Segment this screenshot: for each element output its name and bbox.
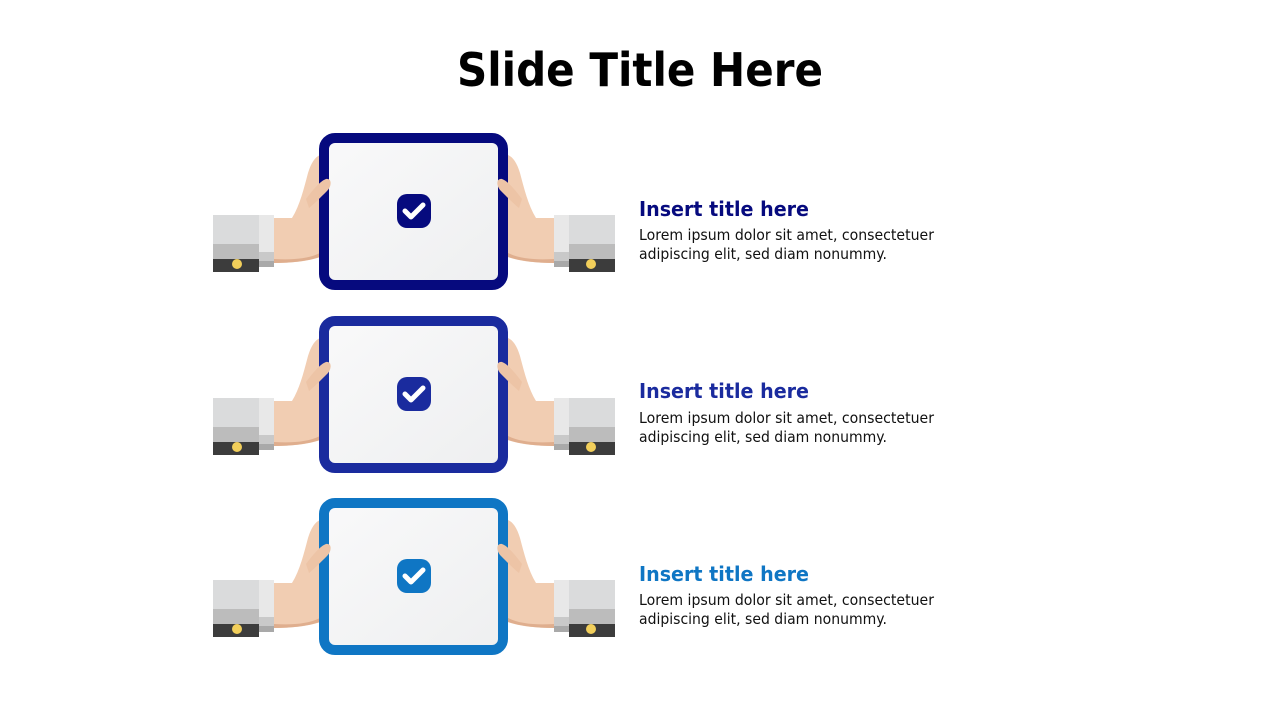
- row 2: tablet with hands: [213, 321, 615, 468]
- text block 2: [639, 379, 935, 446]
- text block 3: [639, 562, 935, 628]
- icon: left hand: [213, 520, 320, 637]
- icon: left thumb: [306, 544, 331, 573]
- tablet frame: [324, 321, 503, 468]
- text block 1: Insert title here: [639, 197, 809, 221]
- icon: check: [397, 194, 431, 228]
- row 3: tablet with hands: [213, 503, 615, 650]
- tablet frame: [324, 503, 503, 650]
- text block 2: Insert title here: [639, 379, 809, 403]
- icon: check: [397, 559, 431, 593]
- text block 1: Lorem ipsum dolor sit amet, consectetuer: [639, 226, 935, 244]
- icon: check: [397, 377, 431, 411]
- icon: left hand: [213, 338, 320, 455]
- text block 1: adipiscing elit, sed diam nonummy.: [639, 245, 887, 263]
- icon: right thumb: [497, 179, 522, 208]
- title: Slide Title Here: [457, 43, 823, 97]
- icon: left hand: [213, 155, 320, 272]
- text block 3: Insert title here: [639, 562, 809, 586]
- text block 3: adipiscing elit, sed diam nonummy.: [639, 610, 887, 628]
- icon: right thumb: [497, 544, 522, 573]
- row 1: tablet with hands: [213, 138, 615, 285]
- icon: left thumb: [306, 362, 331, 391]
- text block 1: [639, 197, 935, 263]
- icon: right hand: [508, 155, 615, 272]
- icon: right hand: [508, 520, 615, 637]
- text block 3: Lorem ipsum dolor sit amet, consectetuer: [639, 591, 935, 609]
- icon: right thumb: [497, 362, 522, 391]
- icon: right hand: [508, 338, 615, 455]
- tablet frame: [324, 138, 503, 285]
- icon: left thumb: [306, 179, 331, 208]
- text block 2: adipiscing elit, sed diam nonummy.: [639, 428, 887, 446]
- text block 2: Lorem ipsum dolor sit amet, consectetuer: [639, 409, 935, 427]
